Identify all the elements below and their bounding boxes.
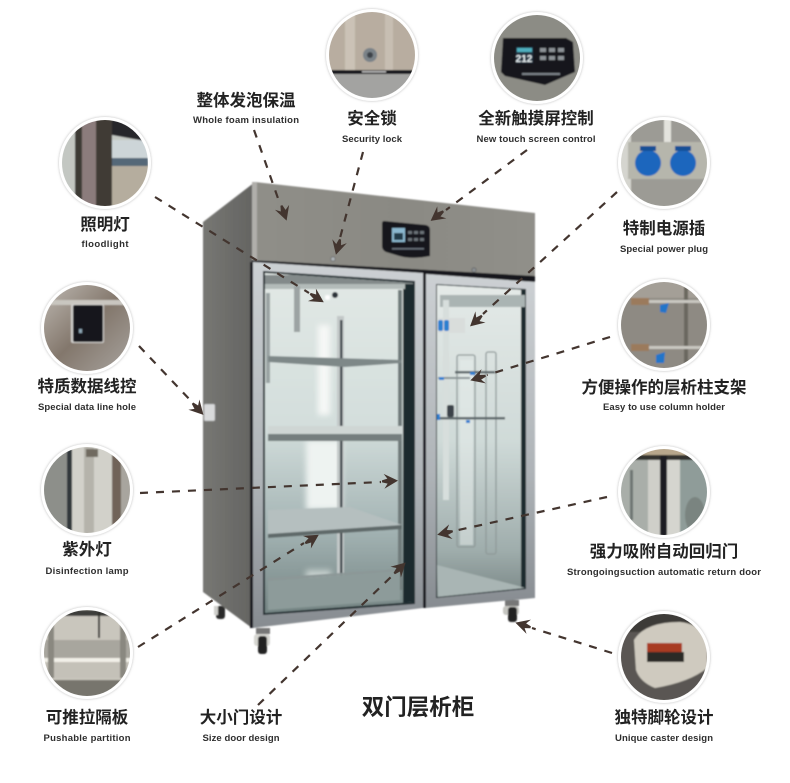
callout: unique caster design xyxy=(614,611,714,744)
arrow: pushable partition xyxy=(138,528,323,647)
photo: door gap xyxy=(618,446,710,538)
shelf support rails xyxy=(266,286,402,590)
callout: unique caster design: Unique caster design xyxy=(615,733,713,744)
callout: size door design: Size door design xyxy=(202,733,280,744)
callout: whole foam insulation: 整体发泡保温 xyxy=(196,90,296,110)
callout: floodlight: 照明灯 xyxy=(80,215,130,234)
arrow: data line hole xyxy=(139,346,209,420)
callout: automatic return door xyxy=(567,446,761,578)
side data line hole cover xyxy=(204,404,215,421)
photo: blue sockets xyxy=(618,117,712,209)
arrow: special power plug xyxy=(465,192,617,332)
arrow: touch screen control xyxy=(426,150,527,227)
callout: special data line hole: Special data line hole xyxy=(38,402,136,413)
double-door chromatography cabinet xyxy=(203,182,535,654)
photo: lock xyxy=(326,9,418,102)
callout: disinfection lamp xyxy=(41,444,133,577)
callout: new touch screen control: 全新触摸屏控制 xyxy=(478,108,594,128)
callout: new touch screen control xyxy=(476,12,596,145)
callout: security lock: 安全锁 xyxy=(347,108,397,128)
callout: floodlight xyxy=(59,117,152,250)
chromatography column tubes xyxy=(457,352,496,554)
photo: partition shelf xyxy=(41,607,133,700)
photo: floodlight xyxy=(59,117,152,210)
touch control panel xyxy=(382,221,430,258)
callout: pushable partition xyxy=(41,607,133,744)
arrow: caster xyxy=(513,615,612,653)
callout: special power plug: 特制电源插 xyxy=(623,219,705,238)
blue socket box xyxy=(438,318,465,333)
left glass door xyxy=(253,262,423,628)
callout: new touch screen control: New touch screen control xyxy=(476,134,596,145)
arrow: foam insulation xyxy=(254,130,294,223)
cabinet casters xyxy=(214,600,519,654)
callout: special data line hole xyxy=(38,282,137,413)
door locks xyxy=(331,257,476,272)
callout: automatic return door: 强力吸附自动回归门 xyxy=(590,541,738,561)
photo: caster xyxy=(618,611,710,703)
callout: special data line hole: 特质数据线控 xyxy=(38,376,137,396)
glass shelves xyxy=(268,356,403,610)
callout: security lock: Security lock xyxy=(342,134,403,145)
arrow: security lock xyxy=(329,152,363,257)
photo: column clamps xyxy=(618,279,710,371)
callout: unique caster design: 独特脚轮设计 xyxy=(614,708,714,727)
arrow: automatic return door xyxy=(436,497,607,542)
photo: touch screen: 212 xyxy=(516,54,533,65)
callout: size door design xyxy=(200,708,282,744)
cabinet side panel xyxy=(203,182,255,628)
arrow: floodlight xyxy=(155,197,328,309)
callout: size door design: 大小门设计 xyxy=(200,708,282,727)
callout: disinfection lamp: Disinfection lamp xyxy=(46,566,129,577)
column holder clamps xyxy=(437,371,505,423)
callout: disinfection lamp: 紫外灯 xyxy=(62,540,112,559)
photo: UV lamp xyxy=(41,444,133,536)
callout: whole foam insulation xyxy=(193,90,299,126)
arrow: disinfection lamp xyxy=(140,473,398,493)
title: 双门层析柜 xyxy=(362,695,474,720)
cabinet top header panel xyxy=(255,182,535,280)
arrow: size door design xyxy=(258,557,411,705)
photo: data line hole xyxy=(41,282,133,374)
callout: pushable partition: Pushable partition xyxy=(44,733,131,744)
arrow: column holder xyxy=(468,337,610,388)
callout: easy to use column holder: Easy to use column holder xyxy=(603,402,725,413)
callout: automatic return door: Strongoingsuction automatic return door xyxy=(567,567,761,578)
callout: pushable partition: 可推拉隔板 xyxy=(46,707,129,727)
callout: special power plug: Special power plug xyxy=(620,244,708,255)
callout: special power plug xyxy=(618,117,712,255)
callout: security lock xyxy=(326,9,418,145)
callout: whole foam insulation: Whole foam insulation xyxy=(193,115,299,126)
callout: easy to use column holder xyxy=(582,279,746,413)
right glass door xyxy=(423,273,535,608)
callout: floodlight: floodlight xyxy=(82,239,129,250)
callout: easy to use column holder: 方便操作的层析柱支架 xyxy=(582,377,746,397)
